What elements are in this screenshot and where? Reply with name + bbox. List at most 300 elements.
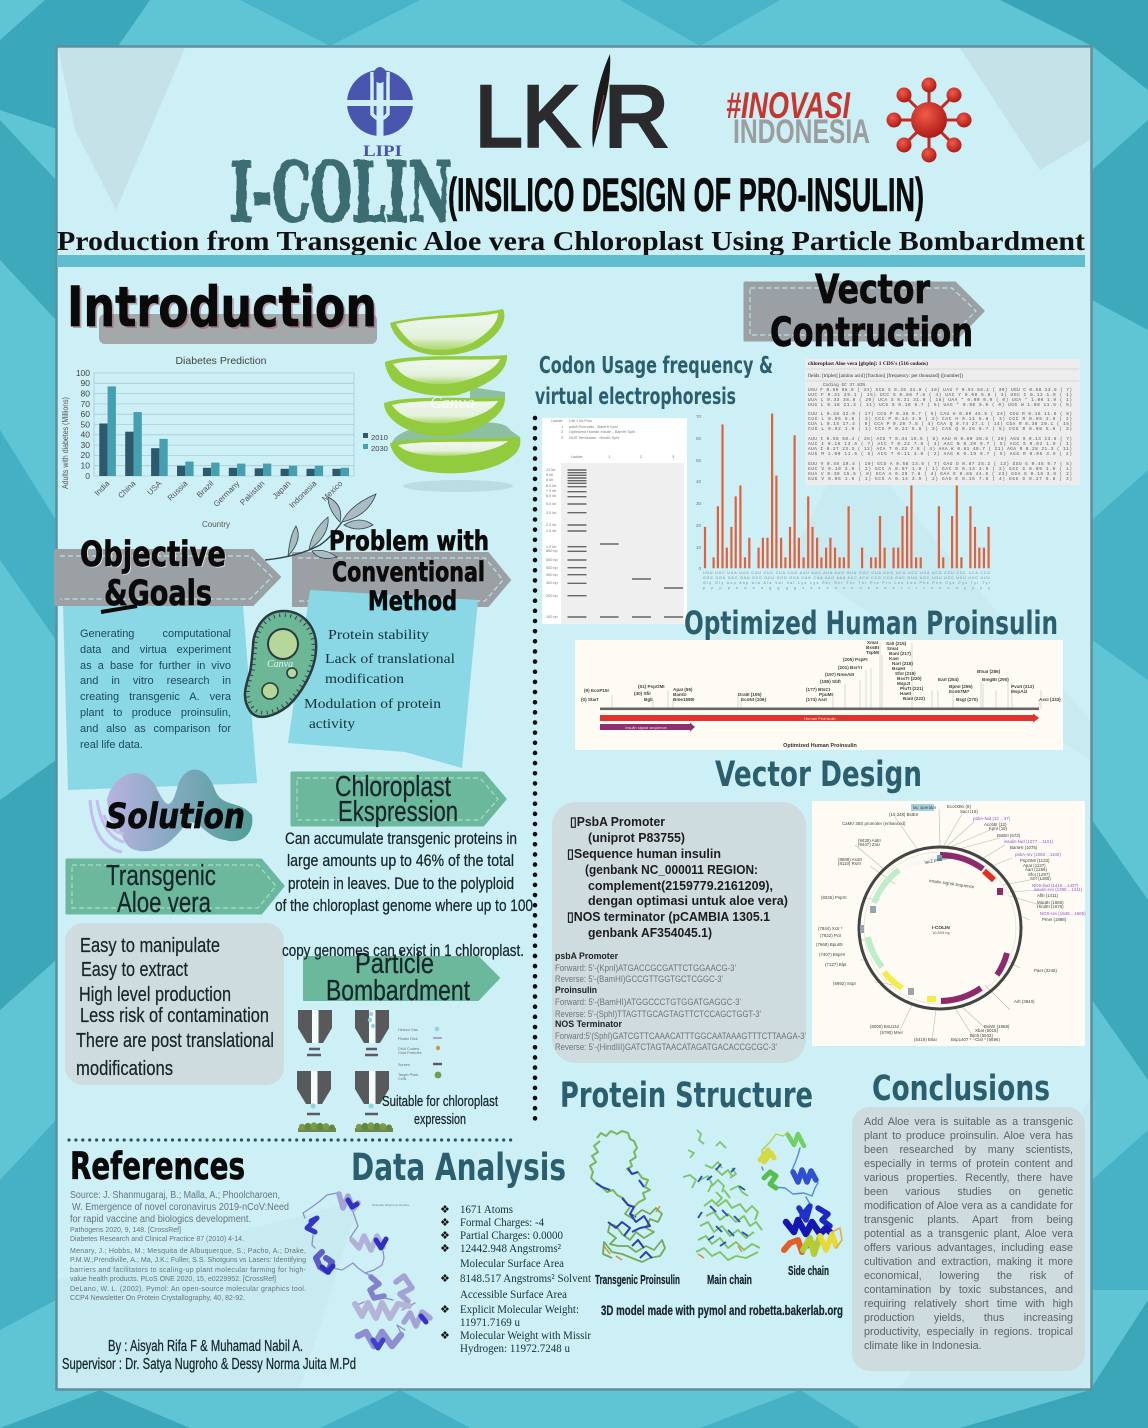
arrow: Objective & Goals	[55, 535, 280, 614]
bar chart: diabetes prediction: 70	[81, 399, 90, 409]
plasmid map: I-COLIN: insulin-fwd (1077 .. 1101)	[1004, 839, 1054, 844]
panel: benefits list: Less risk of contamination	[80, 1005, 269, 1027]
virtual gel electrophoresis: 6.0 kb	[546, 494, 556, 498]
diagram: particle bombardment steps	[297, 1010, 442, 1132]
plasmid map: I-COLIN: BsiWI (4868)	[984, 1024, 1010, 1029]
bar chart: codon usage frequency: 30	[696, 501, 701, 506]
virtual gel electrophoresis: 3	[672, 455, 674, 459]
title underline bar	[57, 255, 1085, 267]
icon: red virus	[886, 78, 972, 162]
subtitle: Production from Transgenic Aloe vera Chloroplast Using Particle Bombardment	[57, 226, 1085, 256]
restriction map: optimized human proinsulin: Human Proinsulin	[804, 716, 836, 721]
restriction map: optimized human proinsulin: KasI	[889, 656, 899, 661]
plasmid map: I-COLIN: PaeI (3246)	[1034, 968, 1057, 973]
restriction map: optimized human proinsulin: (51) PspOMI	[638, 684, 665, 689]
plasmid map: I-COLIN: NOS-fwd (1416 .. 1437)	[1032, 883, 1079, 888]
arrow + heading: Vector Contruction	[745, 267, 983, 356]
image: protein ribbon model: Molecular Weight per Residue	[372, 1203, 410, 1207]
plasmid map: I-COLIN: I-COLIN	[932, 925, 950, 931]
restriction map: optimized human proinsulin: (205) PspFI	[843, 657, 868, 662]
decorative dotted horizontal divider	[69, 1138, 512, 1142]
virtual gel electrophoresis: 2.0 kb	[546, 523, 556, 527]
codon usage table: CUA L 0.15 17.4 ( 9) CCA P 0.29 7.8 ( 4) CAA Q 0.74 27.1 ( 14) CGA R 0.38 29.1 ( 15)	[808, 422, 1072, 427]
virtual gel electrophoresis: NOS Terminator - HindIII SphI	[569, 436, 619, 440]
data analysis list: Partial Charges: 0.0000	[460, 1230, 563, 1242]
panel: vector design primers: Reverse: 5'-(HindIII)GATCTAGTAACATAGATGACACCGCGC-3'	[555, 1042, 777, 1052]
restriction map: optimized human proinsulin: TspMI	[866, 650, 879, 655]
virtual gel electrophoresis: 1.0 kb	[546, 545, 556, 549]
problem list: modification	[325, 671, 404, 686]
heading: Data Analysis: Data Analysis	[351, 1146, 566, 1189]
heading: Particle Bombardment: Particle	[355, 948, 434, 980]
bar chart: diabetes prediction: 80	[81, 388, 90, 398]
restriction map: optimized human proinsulin: HaeII	[900, 691, 911, 696]
restriction map: optimized human proinsulin: BglI	[644, 697, 653, 702]
codon usage table: AUU I 0.58 50.4 ( 26) ACU T 0.44 15.5 ( 8) AAU N 0.80 38.8 ( 20) AGU S 0.14 13.6 ( 7)	[808, 437, 1072, 442]
arrow: Chloroplast Ekspression: Chloroplast	[335, 771, 451, 803]
panel: vector design primers: psbA Promoter	[555, 951, 618, 961]
text: chloroplast expression: copy genomes can exist in 1 chloroplast.	[282, 942, 524, 960]
panel: vector design primers: Reverse: 5'-(BamHI)GCCGTTGGTGCTCGGC-3'	[555, 974, 723, 984]
virtual gel electrophoresis	[542, 418, 687, 624]
bar chart: diabetes prediction: 2030	[371, 444, 388, 453]
virtual gel electrophoresis: 2	[561, 430, 563, 434]
bar chart: diabetes prediction: Japan	[271, 479, 292, 501]
note: objective text: and in vitro research in	[80, 675, 231, 687]
image: aloe vera slices: Canva	[430, 393, 474, 412]
bar chart: codon usage frequency	[696, 414, 991, 590]
restriction map: optimized human proinsulin: BssTI (220)	[897, 676, 922, 681]
bar chart: diabetes prediction: 2010	[371, 433, 388, 442]
restriction map: optimized human proinsulin: BanI (222)	[903, 696, 925, 701]
panel: benefits list	[65, 923, 284, 1085]
restriction map: optimized human proinsulin: MspJI	[897, 681, 910, 686]
plasmid map: I-COLIN: KpnI (16)	[989, 826, 1008, 831]
panel: vector design primers: complement(2159779.2161209),	[588, 878, 773, 893]
codon usage table: AUG M 1.00 11.6 ( 6) ACG T 0.11 3.9 ( 2) AAG K 0.19 9.7 ( 5) AGG R 0.05 3.9 ( 2)	[808, 452, 1072, 457]
panel: conclusions: especially in terms of protein content and	[864, 1158, 1073, 1170]
bar chart: diabetes prediction: Russia	[166, 479, 190, 503]
bar chart: diabetes prediction: USA	[145, 479, 164, 497]
virtual gel electrophoresis: 3	[561, 436, 563, 440]
codon usage table: chloroplast Aloe vera [gbpln]: 1 CDS's (516 codons)	[808, 360, 928, 367]
arrow shape: Particle Bombardment	[304, 957, 499, 1000]
data analysis list: ❖	[440, 1204, 450, 1216]
plasmid map: I-COLIN: PspOMI (1133)	[1020, 858, 1050, 863]
data analysis list	[440, 1204, 592, 1355]
virtual gel electrophoresis: Ladder	[571, 455, 584, 459]
data analysis list: 8148.517 Angstroms² Solvent	[460, 1273, 592, 1285]
problem list: Modulation of protein	[304, 696, 441, 711]
plasmid map: I-COLIN: (6000) BsU21/I	[870, 1024, 900, 1029]
note: problem list background	[288, 590, 478, 768]
codon usage table	[805, 359, 1080, 485]
arrow: Objective & Goals: &Goals	[104, 574, 212, 614]
problem list: Lack of translational	[325, 651, 455, 666]
heading: Particle Bombardment	[326, 948, 470, 1007]
logo: LKIR: LK	[475, 69, 579, 165]
virtual gel electrophoresis: 1	[608, 455, 610, 459]
plasmid map: I-COLIN: (7822) PciI	[820, 933, 841, 938]
panel: benefits list: High level production	[79, 984, 231, 1006]
captions: protein models: Transgenic Proinsulin	[595, 1272, 680, 1287]
plasmid map: I-COLIN: (5419) BsaI	[914, 1037, 937, 1042]
restriction map: optimized human proinsulin: (201) BsrYI	[838, 665, 862, 670]
plasmid map: I-COLIN: 10,593 bp	[932, 930, 951, 935]
decorative dotted vertical divider	[533, 418, 537, 1122]
logo: LKIR	[475, 54, 669, 165]
bar chart: diabetes prediction: 0	[85, 471, 90, 481]
note: objective text: plant to produce proinsulin,	[80, 707, 231, 719]
panel: conclusions	[852, 1107, 1085, 1371]
text: chloroplast expression: Can accumulate transgenic proteins in	[285, 830, 517, 848]
plasmid map: I-COLIN: insulin signal sequence	[929, 878, 975, 889]
restriction map: optimized human proinsulin: SalI (215)	[886, 641, 907, 646]
heading: Solution with blob: Solution	[106, 797, 245, 837]
restriction map: optimized human proinsulin: (177) BtsCI	[806, 687, 830, 692]
panel: conclusions: modification of Aloe vera as a candidate for	[864, 1200, 1073, 1212]
plasmid map: I-COLIN: EcoO3Ki (8)	[947, 804, 971, 809]
heading: codon usage and electrophoresis: virtual electrophoresis	[535, 384, 736, 410]
heading: Problem with Conventional Method: Conventional	[332, 557, 485, 588]
restriction map: optimized human proinsulin: BsgI (270)	[956, 697, 978, 702]
plasmid map: I-COLIN: (7127) BlpI	[825, 962, 846, 967]
panel: benefits list: modifications	[76, 1058, 173, 1080]
restriction map: optimized human proinsulin: BpmI (265)	[949, 684, 973, 689]
panel: conclusions: plant to produce proinsulin. Aloe vera has	[864, 1130, 1073, 1142]
restriction map: optimized human proinsulin: ApaI (55)	[673, 687, 693, 692]
heading: References: References	[70, 1145, 245, 1188]
plasmid map: I-COLIN: XbaI (5016)	[975, 1028, 998, 1033]
arrow: Objective & Goals: Objective	[81, 536, 227, 576]
data analysis list: Explicit Molecular Weight:	[460, 1304, 579, 1316]
virtual gel electrophoresis: 1	[561, 425, 563, 429]
restriction map: optimized human proinsulin: (9) EcoP15I	[584, 688, 609, 693]
panel: conclusions: cultivation and extraction, making it more	[864, 1256, 1073, 1268]
captions: protein models	[595, 1263, 843, 1318]
panel: conclusions: been various studies on genetic	[864, 1186, 1073, 1198]
bar chart: codon usage frequency: Gly Gly Asp Asp Ala Ala Val Val Lys Lys Ser Ser Thr Thr Pro Pro Leu Leu Phe Phe Cys Cys Tyr Tyr	[703, 581, 991, 585]
codon usage table: Coding GC 37.83%	[823, 383, 866, 388]
logo: #INOVASI INDONESIA	[726, 85, 870, 151]
image: aloe vera slices	[384, 309, 520, 492]
data analysis list: ❖	[440, 1304, 450, 1316]
bar chart: diabetes prediction: 50	[81, 420, 90, 430]
bar chart: diabetes prediction: Adults with diabetes (Millions)	[61, 397, 70, 489]
panel: vector design primers: dengan optimasi untuk aloe vera)	[588, 893, 788, 908]
logo: #INOVASI INDONESIA: INDONESIA	[733, 113, 870, 151]
plasmid map: I-COLIN: Bsp1407 * - ClaI * (5696)	[951, 1037, 1000, 1042]
panel: conclusions: potential as a transgenic plant, Aloe vera	[864, 1228, 1073, 1240]
bar chart: codon usage frequency: 70	[696, 414, 701, 419]
problem list: Protein stability	[328, 627, 429, 642]
data analysis list: Hydrogen: 11972.7248 u	[460, 1343, 570, 1355]
logo: #INOVASI INDONESIA: #INOVASI	[726, 85, 851, 126]
virtual gel electrophoresis: 200 bp	[546, 594, 558, 598]
bar chart: diabetes prediction: 90	[81, 378, 90, 388]
virtual gel electrophoresis: 8.0 kb	[546, 484, 556, 488]
panel: vector design primers: Forward: 5'-(KpnI)ATGACCGCGATTCTGGAACG-3'	[555, 963, 736, 973]
references text: value health products. PLoS ONE 2020, 15, e0229952. [CrossRef]	[70, 1276, 276, 1283]
bar chart: codon usage frequency: p p p p a a a a g g g g s s s s u u u u e e e e r r r r o o o o y y y y	[703, 586, 990, 590]
restriction map: optimized human proinsulin: SfoI (219)	[895, 671, 916, 676]
data analysis list: 1671 Atoms	[460, 1204, 513, 1216]
note: objective text: creating transgenic A. vera	[80, 691, 231, 703]
references text: DeLano, W. L. (2002). Pymol: An open-source molecular graphics tool.	[70, 1286, 306, 1293]
plasmid map: I-COLIN: SacI (16)	[960, 809, 978, 814]
logo: LIPI: LIPI	[363, 143, 402, 160]
arrow: Transgenic Aloe vera	[67, 860, 283, 919]
restriction map: optimized human proinsulin: BssBI	[866, 645, 879, 650]
restriction map: optimized human proinsulin: BanGI	[673, 692, 687, 697]
panel: vector design primers: (uniprot P83755)	[588, 830, 685, 845]
plasmid map: I-COLIN: lac operator	[913, 805, 937, 810]
heading: Particle Bombardment: Bombardment	[326, 975, 470, 1007]
plasmid map: I-COLIN: BstEII (673)	[997, 833, 1021, 838]
bar chart: diabetes prediction: 60	[81, 409, 90, 419]
bar chart: codon usage frequency: UUU UUC UUA UUG CUU CUC CUA CUG AUU AUC AUA AUG GUU GUC GUA GUG UCU UCC UCA UCG CCU CCC CCA CCG	[703, 571, 990, 575]
plasmid map: I-COLIN: ApaI (1137)	[1023, 863, 1046, 868]
panel: vector design primers: (genbank NC_000011 REGION:	[585, 862, 758, 877]
plasmid map: I-COLIN: insulin-rev (1390 .. 1411)	[1034, 887, 1083, 892]
bar chart: diabetes prediction	[61, 355, 388, 529]
plasmid map: I-COLIN: (7844) XcII *	[818, 926, 843, 931]
credits: Supervisor : Dr. Satya Nugroho & Dessy Norma Juita M.Pd	[62, 1356, 356, 1373]
caption: suitable for chloroplast expression: expression	[414, 1112, 466, 1128]
bar chart: codon usage frequency: 40	[696, 479, 701, 484]
plasmid map: I-COLIN: (8326) PspXI	[821, 895, 847, 900]
panel: conclusions: contamination by toxic substances, and	[864, 1284, 1073, 1296]
plasmid map: I-COLIN: (9447) ZraI	[858, 842, 880, 847]
credits	[62, 1338, 356, 1373]
panel: conclusions: economical, lowering the risk of	[864, 1270, 1073, 1282]
virtual gel electrophoresis: 650 bp	[546, 558, 558, 562]
diagram: particle bombardment steps: Target Plant	[398, 1073, 419, 1077]
restriction map: optimized human proinsulin	[575, 640, 1063, 750]
arrow: Objective & Goals: Objective	[80, 535, 226, 575]
icon: leaf branch	[265, 494, 376, 560]
problem list	[304, 627, 455, 731]
codon usage table: fields: [triplet] [amino acid] [fraction] [frequency: per thousand] ([number])	[808, 372, 963, 379]
heading: Protein Structure: Protein Structure	[560, 1076, 813, 1116]
plasmid map: I-COLIN: (6992) SspI	[833, 981, 856, 986]
heading: Conclusions: Conclusions	[872, 1069, 1050, 1109]
bar chart: codon usage frequency: 60	[696, 436, 701, 441]
restriction map: optimized human proinsulin: (0) Start	[581, 697, 599, 702]
plasmid map: I-COLIN: (7668) BpuI0I	[816, 942, 843, 947]
diagram: particle bombardment steps: Plastic Disk	[398, 1037, 418, 1041]
codon usage table: GUU V 0.48 19.4 ( 10) GCU A 0.58 13.6 ( 7) GAU D 0.87 25.2 ( 13) GGU G 0.45 9.7 ( 5)	[808, 462, 1072, 467]
diagram: particle bombardment steps: Helium Gas	[398, 1028, 418, 1032]
codon usage table: CUU L 0.28 32.9 ( 17) CCU P 0.36 9.7 ( 5) CAU H 0.89 46.5 ( 24) CGU R 0.15 11.6 ( 6)	[808, 412, 1072, 417]
restriction map: optimized human proinsulin: (197) NmeAIII	[825, 672, 854, 677]
codon usage table: UGU F 0.69 65.9 ( 34) GCU S 0.35 34.9 ( 18) UAU Y 0.91 58.1 ( 30) UGU C 0.88 13.6 ( 7)	[808, 388, 1072, 393]
restriction map: optimized human proinsulin: SmaI	[887, 646, 898, 651]
virtual gel electrophoresis: 500 bp	[546, 566, 558, 570]
virtual gel electrophoresis: 5.0 kb	[546, 502, 556, 506]
plasmid map: I-COLIN: lacZ promoter	[924, 854, 952, 865]
panel: vector design primers: Proinsulin	[555, 985, 597, 995]
restriction map: optimized human proinsulin: Bme1580I	[673, 697, 694, 702]
plasmid map: I-COLIN: BmtI (5533)	[970, 1033, 993, 1038]
codon usage table: GUG V 0.05 1.9 ( 1) GCG A 0.14 3.9 ( 2) GAG E 0.15 7.8 ( 4) GGG G 0.27 5.8 ( 3)	[808, 477, 1072, 482]
restriction map: optimized human proinsulin: Optimized Human Proinsulin	[783, 743, 857, 749]
restriction map: optimized human proinsulin: PpuMI	[819, 692, 833, 697]
data analysis list: ❖	[440, 1217, 450, 1229]
bar chart: diabetes prediction: Indonesia	[288, 479, 319, 510]
panel: conclusions: requiring relatively short time with high	[864, 1298, 1073, 1310]
bar chart: diabetes prediction: 10	[81, 460, 90, 470]
data analysis list: ❖	[440, 1330, 450, 1342]
icon: plant cell: Canva	[267, 659, 293, 670]
codon usage table: AUA I 0.27 23.3 ( 12) ACA T 0.22 7.8 ( 4) AAA K 0.81 40.7 ( 21) AGA R 0.28 21.3 ( 11)	[808, 447, 1072, 452]
panel: vector design primers: genbank AF354045.1)	[588, 925, 712, 940]
plasmid map: I-COLIN: AarI (1256)	[1025, 867, 1048, 872]
virtual gel electrophoresis: 100 bp	[546, 615, 558, 619]
restriction map: optimized human proinsulin: EarI (254)	[938, 677, 959, 682]
arrow + heading: Vector Contruction: Contruction	[770, 310, 973, 356]
virtual gel electrophoresis: 1.5 kb	[546, 529, 556, 533]
bar chart: codon usage frequency: 0	[698, 566, 701, 571]
heading: Introduction: Introduction	[67, 275, 377, 339]
arrow: Chloroplast Ekspression: Ekspression	[338, 796, 458, 828]
restriction map: optimized human proinsulin: BtsaI (286)	[977, 669, 1001, 674]
title	[230, 145, 924, 241]
restriction map: optimized human proinsulin: PvuII (312)	[1011, 684, 1034, 689]
plasmid map: I-COLIN: SrfI (1285)	[1030, 876, 1051, 881]
arrow + heading: Vector Contruction: Vector	[815, 267, 930, 313]
heading: Vector Design: Vector Design	[715, 755, 922, 795]
bar chart: diabetes prediction: India	[93, 479, 112, 498]
heading: Solution with blob	[90, 769, 252, 852]
restriction map: optimized human proinsulin: EcoNI (106)	[741, 697, 766, 702]
text: chloroplast expression	[275, 830, 533, 960]
panel: conclusions: climate like in Indonesia.	[864, 1340, 982, 1352]
restriction map: optimized human proinsulin: insulin signal sequence	[625, 725, 667, 730]
image: transgenic proinsulin stick model	[590, 1131, 665, 1262]
data analysis list: ❖	[440, 1230, 450, 1242]
note: objective text: Generating computational	[80, 628, 231, 640]
virtual gel electrophoresis: 850 bp	[546, 549, 558, 553]
bar chart: diabetes prediction: 20	[81, 450, 90, 460]
arrow: Transgenic Aloe vera: Aloe vera	[117, 887, 212, 919]
restriction map: optimized human proinsulin: PluTI (221)	[900, 686, 924, 691]
plasmid map: I-COLIN: PmeI (1888)	[1042, 917, 1067, 922]
note: objective text	[63, 605, 257, 790]
title: I-COLIN	[230, 145, 452, 241]
bar chart: diabetes prediction: 30	[81, 440, 90, 450]
logo: LKIR: R	[604, 69, 669, 165]
data analysis list: Accessible Surface Area	[460, 1289, 567, 1301]
virtual gel electrophoresis: 2	[640, 455, 642, 459]
codon usage table: CUC L 0.05 5.8 ( 3) CCC P 0.14 3.9 ( 2) CAC H 0.11 5.8 ( 3) CGC R 0.05 3.9 ( 2)	[808, 417, 1072, 422]
problem list: activity	[309, 716, 355, 731]
restriction map: optimized human proinsulin: (40) SfiI	[634, 691, 651, 696]
bar chart: diabetes prediction: Diabetes Prediction	[175, 355, 267, 367]
panel: vector design primers: ▯PsbA Promoter	[570, 814, 665, 829]
panel: benefits list: Easy to manipulate	[80, 935, 220, 957]
panel: conclusions: Add Aloe vera is suitable as a transgenic	[864, 1116, 1073, 1128]
plasmid map: I-COLIN: (9430) AatII	[858, 838, 881, 843]
icon: plant cell	[245, 611, 316, 717]
diagram: particle bombardment steps: Gold Particles	[398, 1051, 422, 1055]
plasmid map: I-COLIN: (7407) BspHI	[819, 952, 845, 957]
panel: vector design primers: ▯Sequence human insulin	[567, 846, 721, 861]
bar chart: codon usage frequency: GGC GGU GAC GAU GCC GCU GGG GGA CAG CAA AAG AAA ACC ACU CCG CCA GUC GUU UGC UGU UCC UCU UUC UUU	[703, 576, 990, 580]
bar chart: diabetes prediction: 40	[81, 430, 90, 440]
plasmid map: I-COLIN: HindIII (1675)	[1037, 904, 1064, 909]
restriction map: optimized human proinsulin: BsaHI	[892, 666, 905, 671]
restriction map: optimized human proinsulin: (185) SbfI	[820, 679, 841, 684]
restriction map: optimized human proinsulin: (174) AarI	[806, 697, 827, 702]
references text	[70, 1190, 307, 1302]
data analysis list: 12442.948 Angstroms²	[460, 1243, 562, 1255]
captions: protein models: Side chain	[788, 1263, 829, 1278]
references text: P.M.W.;Prendiville, A.; Ma, J.K.; Fuller, S.S. Shotguns vs Lasers: Identifying	[70, 1257, 306, 1264]
references text: CCP4 Newsletter On Protein Crystallography, 40, 82-92.	[70, 1295, 245, 1302]
restriction map: optimized human proinsulin: Eco57MI*	[949, 689, 970, 694]
bar chart: diabetes prediction: Mexico	[320, 479, 345, 503]
virtual gel electrophoresis: 400 bp	[546, 573, 558, 577]
references text: Menary, J.; Hobbs, M.; Mesquita de Albuquerque, S.; Pacho, A.; Drake,	[70, 1248, 306, 1255]
heading: Problem with Conventional Method: Problem with	[329, 526, 489, 557]
panel: benefits list: There are post translational	[76, 1030, 274, 1052]
plasmid map: I-COLIN: MauBI (1666)	[1037, 900, 1064, 905]
plasmid map: I-COLIN: psbA-rev (1083 .. 1102)	[1015, 852, 1061, 857]
plasmid map: I-COLIN: (8588) AsiSI	[838, 857, 862, 862]
virtual gel electrophoresis: 12 kb	[546, 468, 555, 472]
note: objective text: and also as comparison for	[80, 723, 231, 735]
virtual gel electrophoresis: Ladder	[551, 419, 564, 423]
data analysis list: ❖	[440, 1243, 450, 1255]
diagram: particle bombardment steps: Screen	[398, 1063, 410, 1067]
logo: LIPI	[347, 64, 413, 160]
plasmid map: I-COLIN: CaMV 35S promoter (enhanced)	[842, 821, 906, 826]
bar chart: codon usage frequency: 20	[696, 523, 701, 528]
references text: Source: J. Shanmugaraj, B.; Malla, A.; Phoolcharoen,	[70, 1190, 280, 1201]
panel: vector design primers: Reverse: 5'-(SphI)TTAGTTGCAGTAGTTCTCCAGCTGGT-3'	[555, 1009, 761, 1019]
plasmid map: I-COLIN: psbA-fwd (12 .. 37)	[973, 816, 1011, 821]
plasmid map: I-COLIN: BamHI (1075)	[1010, 845, 1038, 850]
caption: suitable for chloroplast expression: Suitable for chloroplast	[382, 1094, 498, 1110]
restriction map: optimized human proinsulin: DraIII (105)	[738, 692, 762, 697]
heading: codon usage and electrophoresis: Codon Usage frequency &	[539, 353, 773, 379]
captions: protein models: Main chain	[707, 1272, 752, 1287]
references text: Diabetes Research and Clinical Practice 87 (2010) 4-14.	[70, 1236, 244, 1243]
restriction map: optimized human proinsulin: NarI (218)	[892, 661, 913, 666]
data analysis list: ❖	[440, 1273, 450, 1285]
restriction map: optimized human proinsulin: MspA1I	[1011, 689, 1027, 694]
virtual gel electrophoresis: 7.0 kb	[546, 489, 556, 493]
plasmid map: I-COLIN: (8110) RsrII	[838, 861, 861, 866]
virtual gel electrophoresis: Life 1 kb Plus	[569, 419, 592, 423]
codon usage table: UUA L 0.33 38.8 ( 20) UCA S 0.31 31.0 ( 16) UAA * 0.00 0.0 ( 0) UGA * 1.00 1.9 ( 1)	[808, 398, 1072, 403]
text: chloroplast expression: of the chloroplast genome where up to 100	[275, 897, 533, 915]
arrow: Transgenic Aloe vera: Transgenic	[106, 860, 216, 892]
codon usage table: UUC F 0.31 29.1 ( 15) UCC S 0.08 7.8 ( 4) UAC Y 0.09 5.8 ( 3) UGC C 0.12 1.9 ( 1)	[808, 393, 1072, 398]
plasmid map: I-COLIN: SfoI (1287)	[1028, 872, 1050, 877]
image: main chain model	[683, 1130, 762, 1260]
diagram: particle bombardment steps: Cells	[398, 1077, 407, 1081]
plasmid map: I-COLIN: (5790) MreI	[880, 1030, 903, 1035]
bar chart: diabetes prediction: Brazil	[195, 479, 216, 500]
codon usage table: UUG L 0.18 21.3 ( 11) UCG S 0.18 9.7 ( 5) UAG * 0.00 0.0 ( 0) UGG W 1.00 11.6 ( 6)	[808, 403, 1072, 408]
credits: By : Aisyah Rifa F & Muhamad Nabil A.	[108, 1338, 303, 1355]
codon usage table: CUG L 0.02 1.9 ( 1) CCG P 0.21 5.8 ( 3) CAG Q 0.26 9.7 ( 5) CGG R 0.08 5.8 ( 3)	[808, 427, 1072, 432]
arrow: Chloroplast Ekspression	[292, 771, 505, 828]
panel: benefits list: Easy to extract	[81, 959, 188, 981]
restriction map: optimized human proinsulin: XmaI	[867, 640, 878, 645]
